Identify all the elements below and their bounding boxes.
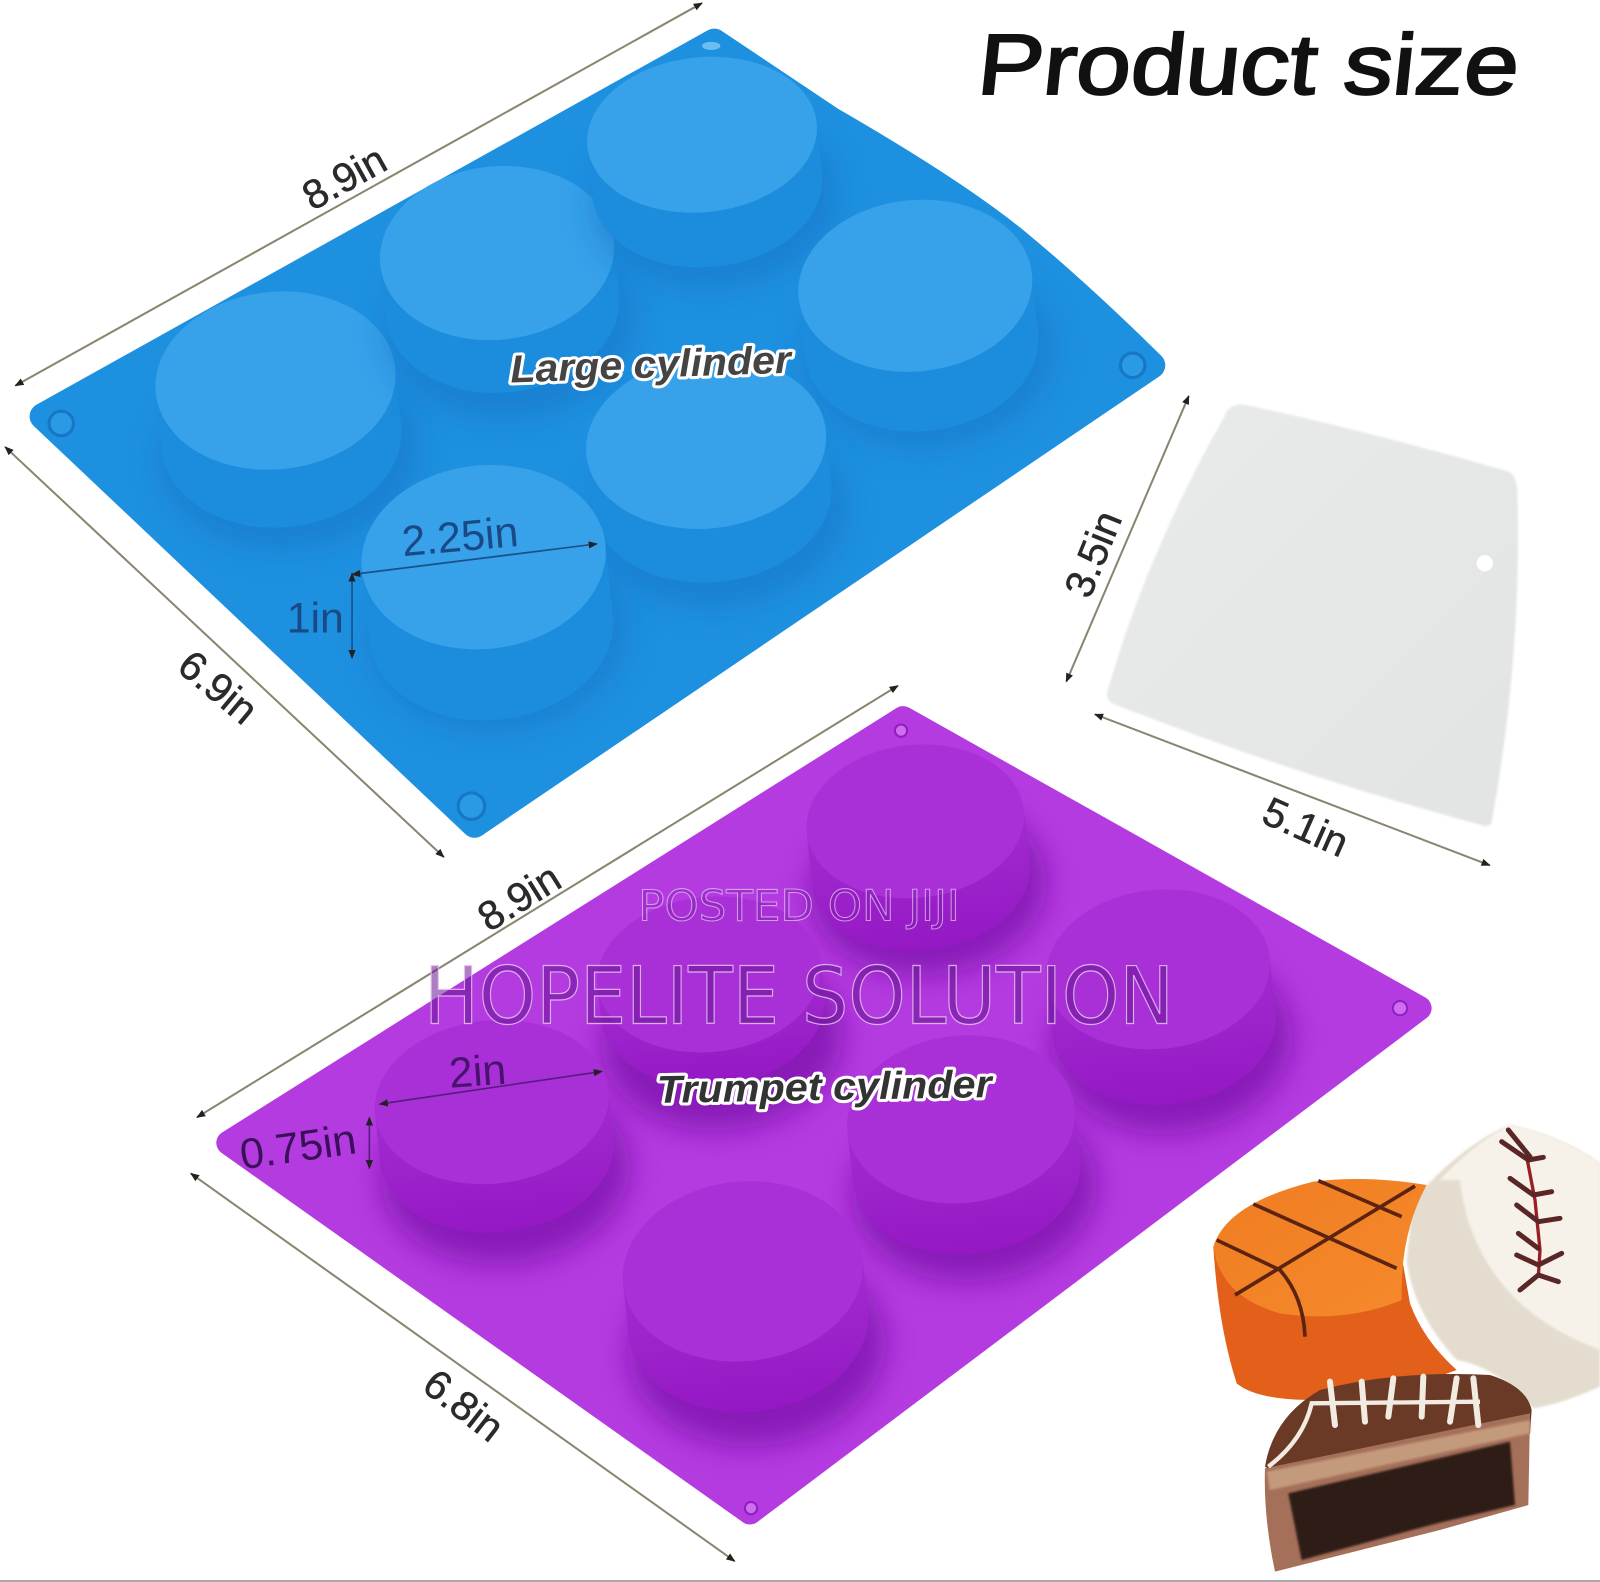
labels: outer dimensions: 3.5in (1055, 504, 1131, 604)
bottom edge strip (0, 1580, 1600, 1582)
labels: cavity dimensions: 2.25in (400, 508, 520, 566)
watermark: hopelite solution: HOPELITE SOLUTION (424, 949, 1174, 1042)
labels: outer dimensions: 5.1in (1256, 788, 1355, 866)
labels: cavity dimensions: 1in (287, 595, 344, 643)
labels: cavity dimensions (237, 508, 520, 1179)
panel: purple trumpet cylinder mould (229, 718, 1419, 1514)
labels: outer dimensions: 8.9in (469, 854, 569, 940)
scraper body (1107, 405, 1518, 826)
labels: outer dimensions: 6.9in (170, 641, 267, 733)
panel: sports cookies (1213, 1125, 1600, 1572)
title: Product size (974, 17, 1524, 113)
cookie: football (1265, 1374, 1532, 1572)
mounting holes: purple (745, 724, 1407, 1514)
mounting holes: blue (49, 42, 1145, 819)
panel: blue large cylinder mould (43, 42, 1152, 824)
cookie: baseball (1407, 1125, 1600, 1408)
label: Trumpet cylinder: Trumpet cylinder (657, 1063, 994, 1112)
cavity row: purple (366, 732, 1301, 1459)
label: Trumpet cylinder: Trumpet cylinder (657, 1063, 994, 1112)
labels: cavity dimensions: 0.75in (237, 1115, 359, 1179)
label: Large cylinder: Large cylinder (510, 339, 794, 391)
inner dimension lines (352, 544, 602, 1168)
labels: outer dimensions (170, 136, 1355, 1451)
tray: purple (229, 718, 1419, 1512)
labels: outer dimensions: 8.9in (294, 136, 394, 219)
scraper hole (1477, 555, 1493, 571)
labels: cavity dimensions: 2in (447, 1046, 508, 1098)
tray: blue (43, 42, 1152, 824)
cookie: basketball (1213, 1179, 1457, 1400)
scraper (1107, 405, 1518, 826)
cavity row: blue (142, 44, 1064, 745)
watermark: posted on jiji: POSTED ON JIJI (638, 881, 960, 931)
label: Large cylinder: Large cylinder (510, 339, 794, 391)
labels: outer dimensions: 6.8in (415, 1360, 513, 1451)
